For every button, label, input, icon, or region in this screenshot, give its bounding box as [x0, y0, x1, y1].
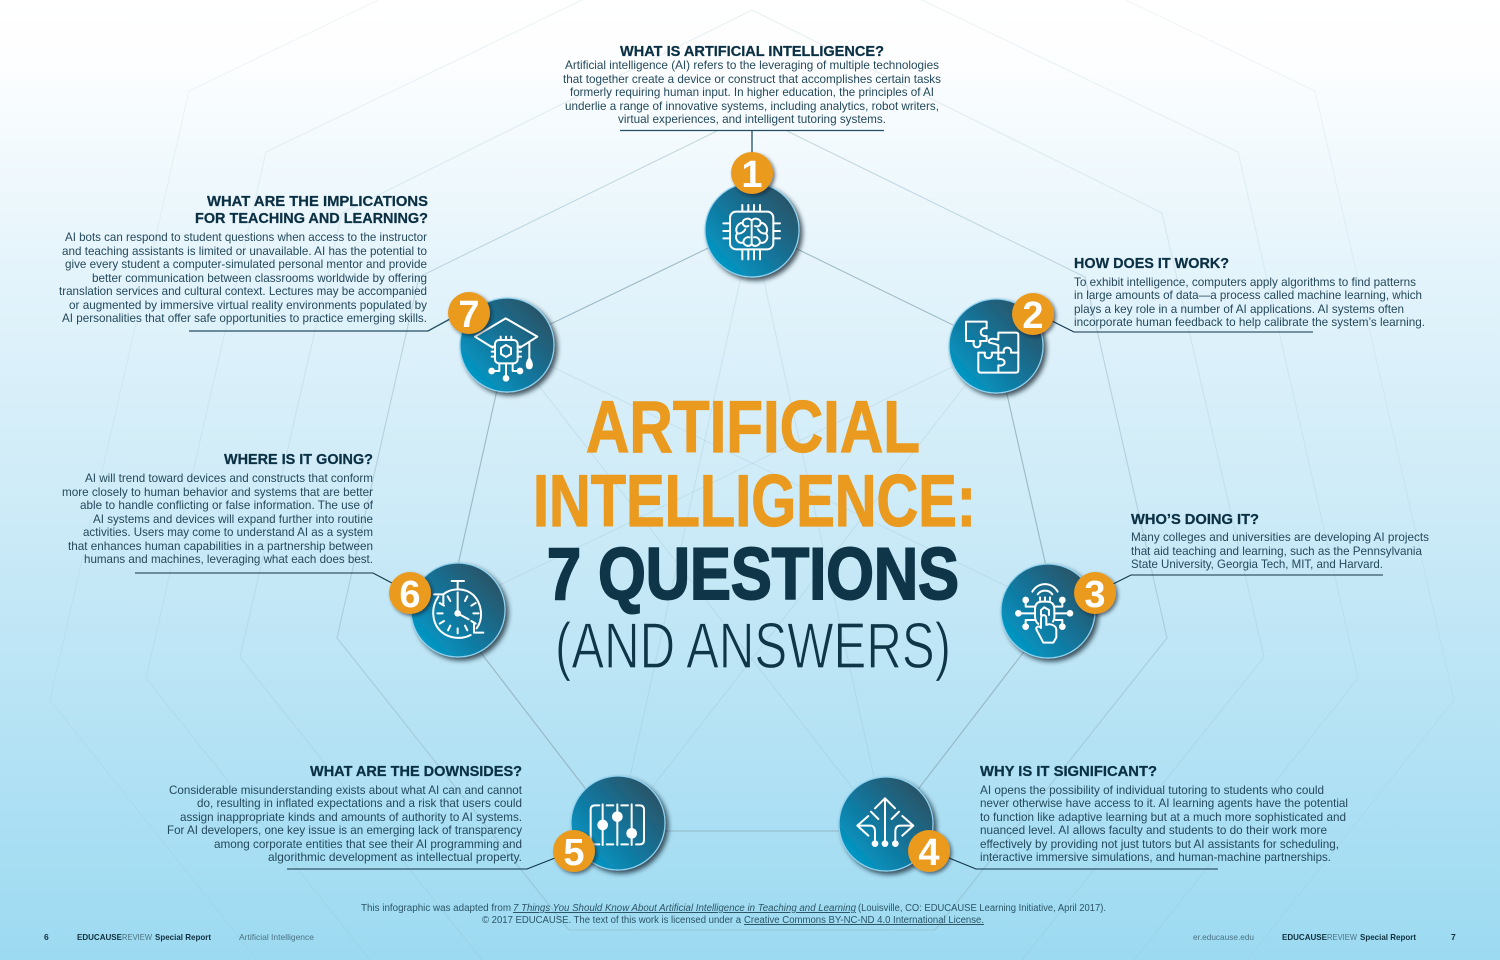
panel: how does it work: plays a key role in a number of AI applications. AI systems often [1074, 302, 1404, 316]
panel: who's doing it: WHO’S DOING IT? [1131, 512, 1259, 528]
node 5: sliders [553, 776, 665, 874]
panel: how does it work: To exhibit intelligence, computers apply algorithms to find patterns [1074, 275, 1416, 289]
panel: what is artificial intelligence: formerly requiring human input. In higher education, the principles of AI [570, 85, 934, 99]
footer right: er.educause.edu [1193, 932, 1254, 942]
panel: where is it going: humans and machines, leveraging what each does best. [84, 552, 373, 566]
panel: why is it significant: interactive immersive simulations, and human-machine partnerships. [980, 850, 1331, 864]
panel: where is it going: activities. Users may come to understand AI as a system [83, 525, 373, 539]
footer left: Special Report [155, 932, 211, 942]
panel: what is artificial intelligence: that together create a device or construct that accomplishes certain tasks [563, 72, 941, 86]
panel: how does it work [1052, 256, 1425, 332]
panel: how does it work: HOW DOES IT WORK? [1074, 256, 1229, 272]
panel: why is it significant: AI opens the possibility of individual tutoring to students who could [980, 783, 1324, 797]
footer right: EDUCAUSE [1282, 932, 1327, 942]
credit note [361, 903, 1106, 926]
icon: stopwatch [433, 581, 483, 638]
badge 2: 2 [1022, 295, 1044, 337]
panel: where is it going: AI systems and devices will expand further into routine [93, 512, 373, 526]
badge 1: 1 [741, 154, 763, 196]
panel: where is it going: AI will trend toward devices and constructs that conform [85, 471, 373, 485]
main title: 7 QUESTIONS [547, 534, 959, 615]
panel: implications for teaching and learning: or augmented by immersive virtual reality environments populated by [69, 298, 427, 312]
footer left [44, 932, 314, 942]
main title: INTELLIGENCE: [533, 461, 976, 542]
panel: what are the downsides [167, 764, 555, 869]
panel: why is it significant: nuanced level. AI allows faculty and students to do their work more [980, 823, 1327, 837]
footer right: REVIEW [1327, 932, 1357, 942]
panel: who's doing it: State University, Georgia Tech, MIT, and Harvard. [1131, 557, 1383, 571]
icon: sliders [591, 804, 644, 845]
icon: brain chip [723, 205, 780, 259]
panel: who's doing it [1113, 512, 1429, 584]
badge 3: 3 [1084, 574, 1106, 616]
panel: why is it significant: never otherwise have access to it. AI learning agents have the potential [980, 796, 1348, 810]
panel: how does it work: in large amounts of data—a process called machine learning, which [1074, 288, 1422, 302]
panel: what is artificial intelligence: Artificial intelligence (AI) refers to the leveraging of multiple technologies [565, 58, 939, 72]
panel: what is artificial intelligence: underlie a range of innovative systems, including analytics, robot writers, [565, 99, 939, 113]
badge 4: 4 [918, 832, 940, 874]
icon: puzzle [966, 322, 1018, 373]
credit note: (Louisville, CO: EDUCAUSE Learning Initiative, April 2017). [858, 903, 1106, 914]
panel: implications for teaching and learning: and teaching assistants is limited or unavailable. AI has the potential to [62, 244, 427, 258]
panel: where is it going: more closely to human behavior and systems that are better [62, 485, 373, 499]
panel: where is it going: able to handle conflicting or false information. The use of [80, 498, 374, 512]
footer left: EDUCAUSE [77, 932, 122, 942]
icon: touch network [1015, 584, 1073, 643]
panel: implications for teaching and learning: better communication between classrooms worldwide by offering [92, 271, 427, 285]
panel: implications for teaching and learning: give every student a computer-simulated personal mentor and provide [65, 257, 427, 271]
panel: what are the downsides: algorithmic development as intellectual property. [268, 850, 522, 864]
panel: where is it going: WHERE IS IT GOING? [224, 452, 373, 468]
node 2: puzzle [949, 293, 1054, 393]
main title [533, 387, 976, 682]
footer left: REVIEW [122, 932, 152, 942]
footer left: 6 [44, 932, 49, 942]
panel: how does it work: incorporate human feedback to help calibrate the system’s learning. [1074, 315, 1425, 329]
footer right: Special Report [1360, 932, 1416, 942]
badge 6: 6 [399, 574, 421, 616]
panel: implications for teaching and learning: AI personalities that offer safe opportunities to practice emerging skills. [62, 311, 427, 325]
panel: who's doing it: that aid teaching and learning, such as the Pennsylvania [1131, 544, 1422, 558]
main title: ARTIFICIAL [586, 387, 920, 468]
panel: what are the downsides: among corporate entities that see their AI programming and [214, 837, 522, 851]
footer left: Artificial Intelligence [239, 932, 314, 942]
panel: why is it significant: WHY IS IT SIGNIFICANT? [980, 764, 1157, 780]
panel: why is it significant: to function like adaptive learning but at a much more sophisticated and [980, 810, 1346, 824]
node 7: graduation cap chip [448, 292, 554, 392]
panel: what is artificial intelligence: WHAT IS ARTIFICIAL INTELLIGENCE? [620, 44, 884, 60]
credit note: 7 Things You Should Know About Artificial Intelligence in Teaching and Learning [513, 903, 856, 914]
panel: implications for teaching and learning [59, 194, 450, 331]
panel: what is artificial intelligence [563, 44, 941, 160]
panel: why is it significant [949, 764, 1348, 869]
panel: what are the downsides: do, resulting in inflated expectations and a risk that users could [197, 796, 522, 810]
panel: what is artificial intelligence: virtual experiences, and intelligent tutoring systems. [618, 112, 886, 126]
badge 5: 5 [563, 832, 585, 874]
footer right [1193, 932, 1456, 942]
main title: (AND ANSWERS) [555, 609, 951, 682]
node 1: brain chip [705, 152, 799, 277]
panel: what are the downsides: Considerable misunderstanding exists about what AI can and cannot [169, 783, 523, 797]
footer right: 7 [1451, 932, 1456, 942]
node 4: branching arrows [839, 777, 950, 874]
panel: implications for teaching and learning: WHAT ARE THE IMPLICATIONS [207, 194, 428, 210]
credit note: This infographic was adapted from [361, 903, 511, 914]
panel: where is it going: that enhances human capabilities in a partnership between [68, 539, 373, 553]
panel: implications for teaching and learning: translation services and cultural context. Lectures may be accompanied [59, 284, 427, 298]
node 3: touch network [1001, 564, 1116, 658]
credit note: © 2017 EDUCAUSE. The text of this work is licensed under a [482, 915, 741, 926]
badge 7: 7 [458, 294, 480, 336]
icon: branching arrows [857, 798, 913, 847]
panel: implications for teaching and learning: AI bots can respond to student questions when access to the instructor [65, 230, 427, 244]
panel: what are the downsides: WHAT ARE THE DOWNSIDES? [310, 764, 522, 780]
panel: what are the downsides: For AI developers, one key issue is an emerging lack of transparency [167, 823, 522, 837]
credit note: Creative Commons BY-NC-ND 4.0 International License. [744, 915, 984, 926]
panel: why is it significant: effectively by providing not just tutors but AI assistants for scheduling, [980, 837, 1339, 851]
panel: where is it going [62, 452, 392, 583]
panel: implications for teaching and learning: FOR TEACHING AND LEARNING? [195, 211, 428, 227]
panel: what are the downsides: assign inappropriate kinds and amounts of authority to AI systems. [180, 810, 522, 824]
node 6: stopwatch [389, 563, 505, 657]
icon: graduation cap chip [475, 318, 537, 382]
panel: who's doing it: Many colleges and universities are developing AI projects [1131, 530, 1429, 544]
